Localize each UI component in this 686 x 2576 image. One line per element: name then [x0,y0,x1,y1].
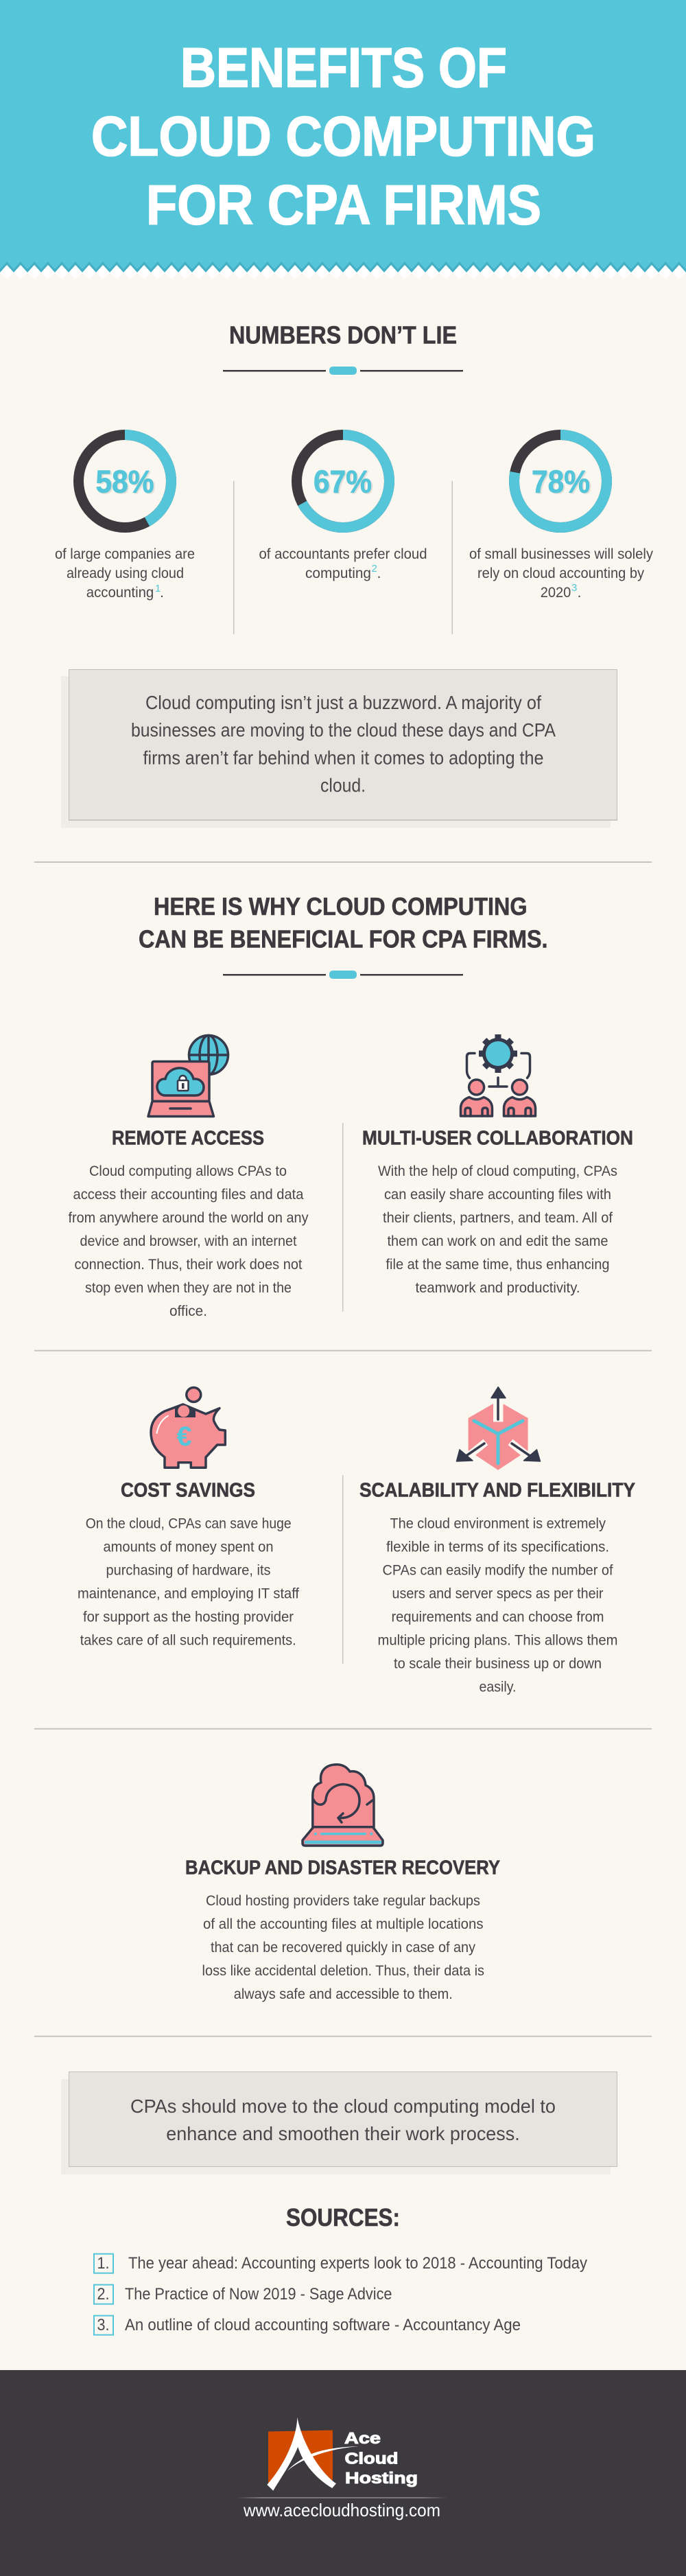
stat: 58 percent: 58% [97,465,155,500]
text block: for support as the hosting provider [83,1609,294,1625]
source 3: 3. [97,2316,110,2334]
stat: 67 percent: . [377,565,381,581]
stat: 78 percent: 2020 [541,584,571,601]
title: FOR CPA FIRMS [146,174,541,236]
stat: 67 percent: 2 [372,563,377,575]
icon: piggy bank [151,1388,225,1467]
text block: loss like accidental deletion. Thus, their data is [202,1962,484,1979]
heading: sources: SOURCES: [286,2203,400,2231]
text block: connection. Thus, their work does not [74,1256,303,1273]
callout: conclusion: enhance and smoothen their work process. [166,2123,520,2144]
donut chart 78 [514,435,606,527]
header banner with title [0,0,686,285]
text block: to scale their business up or down [394,1656,602,1672]
heading: BACKUP AND DISASTER RECOVERY [185,1857,500,1879]
callout: conclusion [61,2072,617,2174]
text block [378,1163,617,1296]
text block: of all the accounting files at multiple locations [203,1916,484,1932]
text block [69,1163,309,1319]
stat: 58 percent: accounting [86,584,154,601]
donut chart 58 [78,435,172,527]
panel: remote access [69,1035,309,1319]
text block: office. [169,1303,207,1319]
stat: 58 percent: already using cloud [67,565,184,581]
text block: can easily share accounting files with [384,1186,611,1203]
footer [0,2370,686,2576]
text block [78,1516,299,1649]
text block [202,1892,484,2002]
title: BENEFITS OF [180,37,507,99]
panel: backup and disaster recovery [185,1765,500,2002]
source 3: An outline of cloud accounting software - Accountancy Age [125,2316,521,2334]
text block: flexible in terms of its specifications. [386,1539,609,1555]
stat: 67 percent: of accountants prefer cloud [259,546,427,562]
stat: 58 percent: 58% [96,464,154,500]
panel: multi-user collaboration [362,1034,633,1296]
text block [377,1516,617,1695]
text block: teamwork and productivity. [416,1279,580,1296]
stat: 67 percent: 67% [314,464,372,500]
stat: 58 percent: of large companies are [55,546,195,562]
callout: cloud computing intro [61,670,617,828]
stat: 67 percent: 67% [315,465,373,500]
text block: On the cloud, CPAs can save huge [86,1516,292,1532]
logo: Ace Cloud Hosting: Hosting [345,2469,418,2487]
text block: device and browser, with an internet [80,1233,297,1249]
donut chart 67 [296,435,390,527]
logo: Ace Cloud Hosting: Cloud [344,2449,398,2467]
text block: that can be recovered quickly in case of any [211,1939,475,1956]
heading: SCALABILITY AND FLEXIBILITY [359,1480,635,1502]
text block: their clients, partners, and team. All of [383,1209,613,1226]
title [91,37,595,236]
stat: 78 percent: 3 [571,582,577,594]
heading divider [223,367,463,375]
icon: gear and two users [461,1034,535,1116]
text block: takes care of all such requirements. [80,1632,296,1649]
stat: 67 percent [259,435,427,581]
callout: cloud computing intro: Cloud computing isn’t just a buzzword. A majority of [145,692,541,713]
text block: purchasing of hardware, its [106,1562,270,1579]
callout: cloud computing intro: firms aren’t far behind when it comes to adopting the [143,747,543,769]
heading: MULTI-USER COLLABORATION [362,1128,633,1150]
text block: Cloud hosting providers take regular backups [206,1892,480,1909]
heading: here is why [139,892,548,953]
heading: REMOTE ACCESS [112,1128,264,1150]
text block: maintenance, and employing IT staff [78,1586,299,1602]
text block: requirements and can choose from [391,1609,604,1625]
stat: 78 percent: of small businesses will solely [469,546,653,562]
source 2: 2. [97,2285,110,2304]
sources list [94,2254,587,2335]
source 1: 1. [97,2254,110,2273]
icon: expanding cube [457,1387,541,1470]
logo: Ace Cloud Hosting [267,2417,418,2491]
text block: CPAs can easily modify the number of [383,1562,613,1579]
heading: here is why: HERE IS WHY CLOUD COMPUTING [154,892,528,920]
stat: 58 percent: . [160,584,164,601]
text block: file at the same time, thus enhancing [386,1256,609,1273]
heading divider [223,971,463,979]
website url: www.acecloudhosting.com [243,2500,440,2520]
callout: conclusion: CPAs should move to the cloud computing model to [130,2096,556,2117]
text block: The cloud environment is extremely [390,1516,606,1532]
stat: 67 percent: computing [305,565,371,581]
heading: numbers don't lie: NUMBERS DON’T LIE [229,321,457,349]
stat: 58 percent: 1 [155,583,161,594]
stat: 78 percent: . [578,584,581,601]
text block: always safe and accessible to them. [234,1986,453,2002]
text block: With the help of cloud computing, CPAs [378,1163,617,1179]
text block: access their accounting files and data [73,1186,304,1203]
callout: cloud computing intro: businesses are moving to the cloud these days and CPA [131,719,556,741]
heading: COST SAVINGS [121,1480,255,1502]
icon: laptop with cloud lock and globe [148,1035,228,1116]
stat: 78 percent: 78% [533,465,591,500]
text block: Cloud computing allows CPAs to [89,1163,287,1179]
panel: scalability and flexibility [359,1387,635,1695]
icon: piggy bank: € [176,1422,192,1452]
stat: 78 percent: 78% [532,464,590,500]
text block: multiple pricing plans. This allows them [377,1632,617,1649]
text block: from anywhere around the world on any [69,1209,309,1226]
panel: cost savings [78,1388,299,1649]
heading: here is why: CAN BE BENEFICIAL FOR CPA FIRMS. [139,925,548,953]
text block: amounts of money spent on [103,1539,273,1555]
text block: users and server specs as per their [392,1586,604,1602]
stat: 58 percent [55,435,195,601]
callout: cloud computing intro: cloud. [320,774,366,796]
text block: stop even when they are not in the [85,1279,292,1296]
icon: cloud backup server [303,1765,383,1846]
text block: them can work on and edit the same [387,1233,608,1249]
title: CLOUD COMPUTING [91,106,595,167]
stat: 78 percent [469,435,653,601]
text block: easily. [479,1679,516,1695]
stat: 78 percent: rely on cloud accounting by [477,565,644,581]
source 2: The Practice of Now 2019 - Sage Advice [125,2285,392,2304]
logo: Ace Cloud Hosting: Ace [344,2429,381,2447]
source 1: The year ahead: Accounting experts look to 2018 - Accounting Today [128,2254,587,2273]
